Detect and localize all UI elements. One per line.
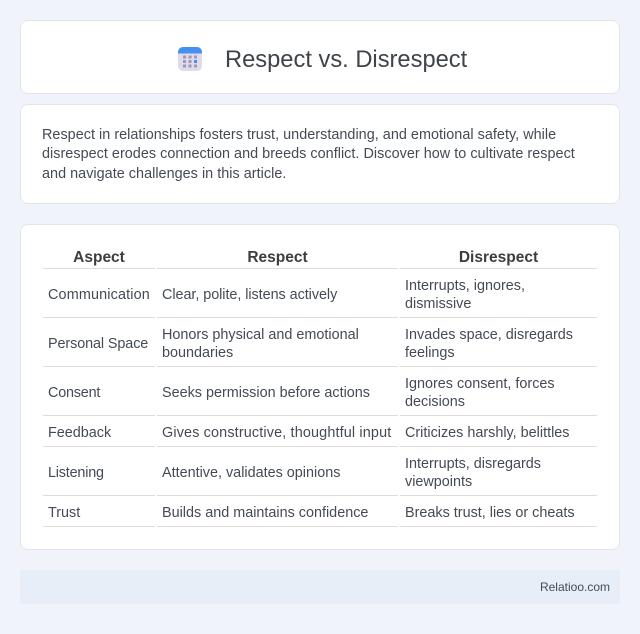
table: feelings xyxy=(405,345,455,361)
table: Breaks trust, lies or cheats xyxy=(405,505,575,521)
table card xyxy=(20,224,620,550)
intro text xyxy=(42,126,575,182)
table: Attentive, validates opinions xyxy=(162,465,340,481)
table: viewpoints xyxy=(405,474,472,490)
table: Criticizes harshly, belittles xyxy=(405,425,569,441)
icon: calendar xyxy=(178,47,202,71)
row: Consent: Consent xyxy=(48,385,100,401)
intro text: and navigate challenges in this article. xyxy=(42,166,286,182)
footer bar xyxy=(20,570,620,604)
table: Seeks permission before actions xyxy=(162,385,370,401)
table: boundaries xyxy=(162,345,233,361)
intro text: Respect in relationships fosters trust, understanding, and emotional safety, while xyxy=(42,126,556,142)
intro text: disrespect erodes connection and breeds conflict. Discover how to cultivate respect xyxy=(42,146,575,162)
table: Interrupts, ignores, xyxy=(405,278,525,294)
table: Interrupts, disregards xyxy=(405,456,541,472)
column heading: Aspect: Aspect xyxy=(73,249,125,266)
intro card xyxy=(20,104,620,204)
row: Trust: Trust xyxy=(48,505,80,521)
row: Feedback: Feedback xyxy=(48,425,111,441)
title: Respect vs. Disrespect xyxy=(225,47,467,73)
table: Clear, polite, listens actively xyxy=(162,287,337,303)
row: Listening: Listening xyxy=(48,465,104,481)
table: Ignores consent, forces xyxy=(405,376,555,392)
column heading: Respect: Respect xyxy=(247,249,308,266)
footer text: Relatioo.com xyxy=(540,580,610,594)
table: decisions xyxy=(405,394,465,410)
table: Gives constructive, thoughtful input xyxy=(162,425,391,441)
table: Honors physical and emotional xyxy=(162,327,359,343)
row: Personal Space: Personal Space xyxy=(48,336,148,352)
row: Communication: Communication xyxy=(48,287,150,303)
table: dismissive xyxy=(405,296,471,312)
table: Builds and maintains confidence xyxy=(162,505,368,521)
column heading: Disrespect: Disrespect xyxy=(459,249,538,266)
table: Invades space, disregards xyxy=(405,327,573,343)
title card xyxy=(20,20,620,94)
